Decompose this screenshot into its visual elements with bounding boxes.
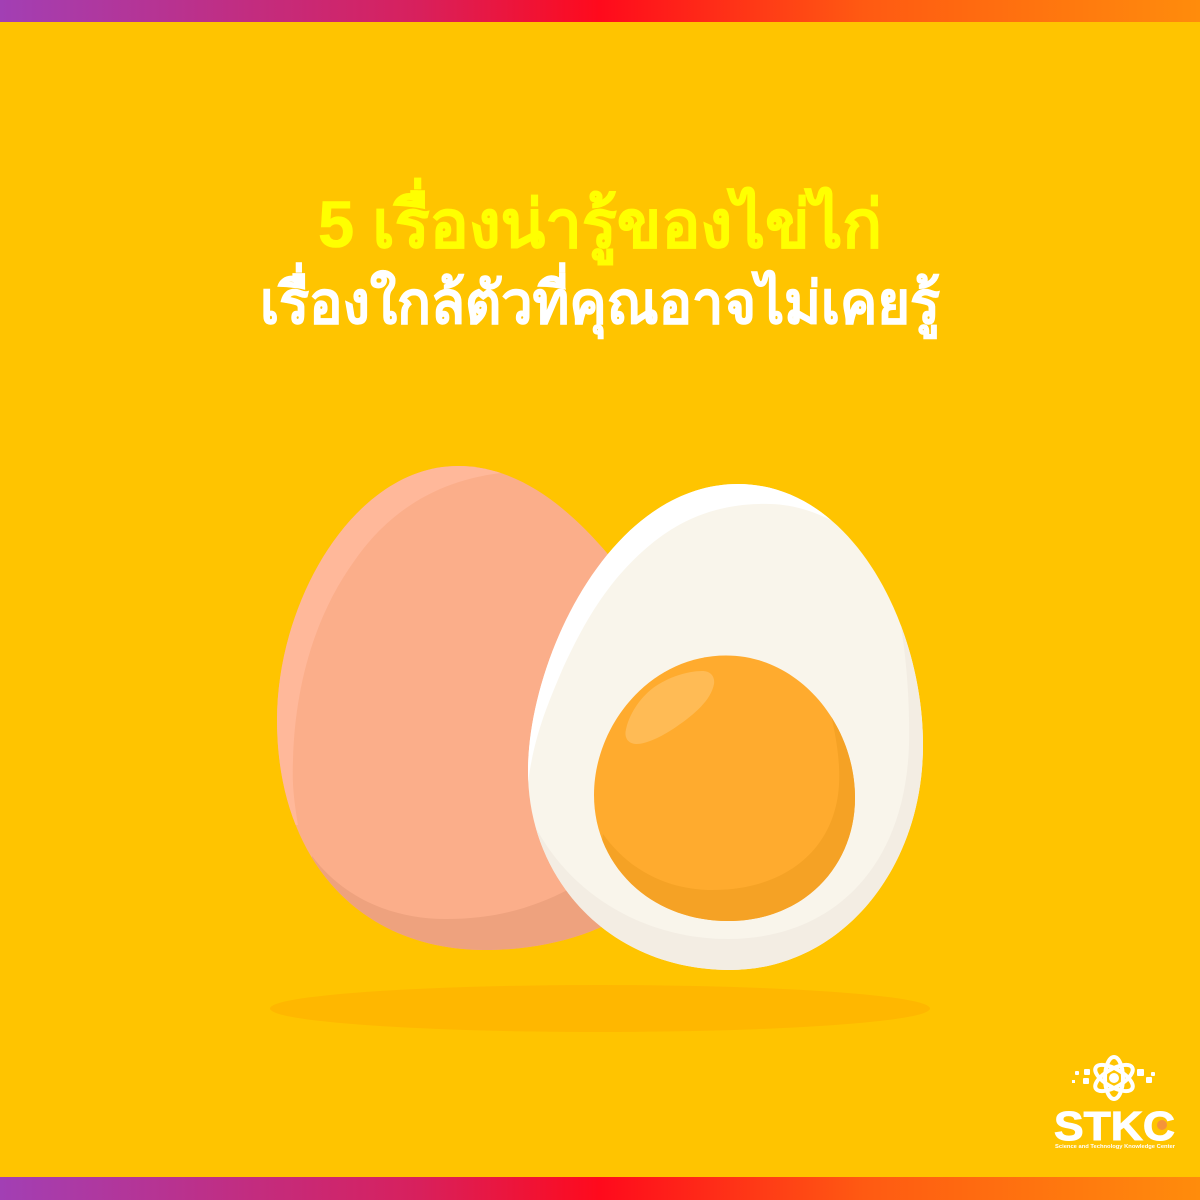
bottom gradient bar xyxy=(0,1177,1200,1200)
full page illustration xyxy=(263,178,1175,1149)
logo orange dot xyxy=(1157,1120,1167,1130)
yolk xyxy=(594,656,855,921)
logo caption: Science and Technology Knowledge Center xyxy=(1055,1144,1176,1150)
STKC logo xyxy=(1054,1057,1176,1150)
top gradient bar xyxy=(0,0,1200,22)
title line 1: 5 เรื่องน่ารู้ของไข่ไก่ xyxy=(318,177,882,266)
logo atom icon xyxy=(1072,1057,1155,1099)
back egg highlight xyxy=(277,466,500,825)
title line 2: เรื่องใกล้ตัวที่คุณอาจไม่เคยรู้ xyxy=(260,262,940,340)
egg white xyxy=(520,480,930,975)
egg top highlight xyxy=(528,484,832,782)
egg shade xyxy=(536,624,923,970)
logo wordmark: STKC xyxy=(1054,1103,1175,1149)
back egg xyxy=(277,466,608,950)
yolk highlight xyxy=(625,671,714,744)
back egg shade xyxy=(312,856,601,950)
cut egg xyxy=(528,484,923,970)
ground shadow xyxy=(270,985,930,1032)
back egg body xyxy=(277,466,608,950)
yolk shade xyxy=(602,717,855,921)
title xyxy=(260,177,940,340)
